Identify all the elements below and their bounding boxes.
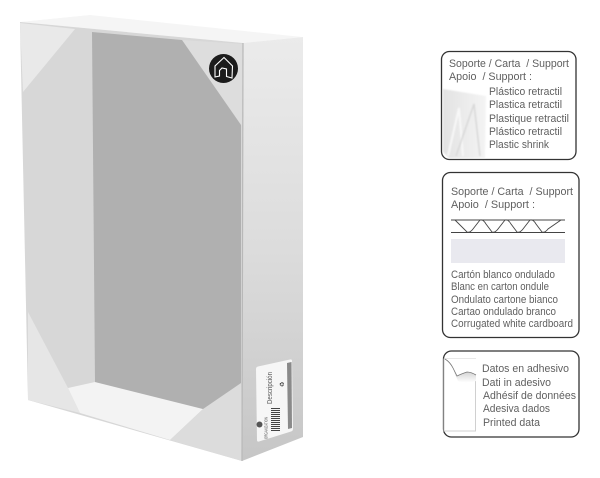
material list: Plastique retractil [489, 113, 569, 125]
material list [482, 363, 576, 429]
panel heading: Apoio / Support : [449, 71, 532, 83]
box front face [20, 22, 243, 461]
label barcode [271, 407, 280, 432]
material list: Corrugated white cardboard [451, 318, 573, 330]
house logo badge [209, 54, 238, 83]
label fine print [287, 362, 292, 429]
sticker peel icon [444, 359, 476, 431]
material list: Printed data [483, 417, 541, 429]
label brand text: ORGANIZATION [264, 417, 268, 439]
panel heading: Apoio / Support : [451, 199, 535, 211]
material list: Dati in adesivo [482, 377, 551, 389]
material list: Cartao ondulado branco [451, 306, 556, 318]
material list: Cartón blanco ondulado [451, 269, 555, 281]
material list [451, 269, 573, 330]
box right side face [242, 37, 303, 461]
front bottom-right facet [170, 383, 242, 461]
panel: shrink plastic [442, 52, 576, 160]
box lid top face [20, 15, 302, 43]
panel: printed data [444, 351, 579, 437]
material list: Blanc en carton ondule [451, 281, 549, 293]
panel heading [451, 186, 573, 211]
label title: Descripción [267, 372, 274, 404]
white cardboard swatch [451, 239, 565, 263]
material list: Adesiva dados [483, 403, 550, 415]
material list: Plastic shrink [489, 139, 549, 151]
label logo dot [256, 422, 262, 428]
shrink wrap image [443, 89, 486, 158]
material list: Datos en adhesivo [482, 363, 569, 375]
material list: Plastica retractil [489, 99, 562, 111]
label recycle marks: ♻ [279, 382, 286, 387]
product box [20, 15, 303, 461]
front bottom-left facet [28, 312, 80, 413]
box edge highlight [242, 43, 243, 461]
material list: Plástico retractil [489, 86, 562, 98]
corrugation diagram [451, 220, 565, 232]
material list [489, 86, 569, 151]
side product label [256, 359, 293, 442]
front bottom facet [68, 382, 203, 440]
panel: corrugated cardboard [442, 172, 579, 338]
panel heading: Soporte / Carta / Support [449, 58, 569, 70]
panel heading: Soporte / Carta / Support [451, 186, 573, 198]
grey window [92, 32, 241, 409]
front top-right light facet [182, 40, 243, 126]
front top-left light facet [20, 23, 75, 92]
material list: Ondulato cartone bianco [451, 294, 558, 306]
material list: Plástico retractil [489, 126, 562, 138]
material list: Adhésif de données [483, 390, 576, 402]
panel heading [449, 58, 569, 83]
